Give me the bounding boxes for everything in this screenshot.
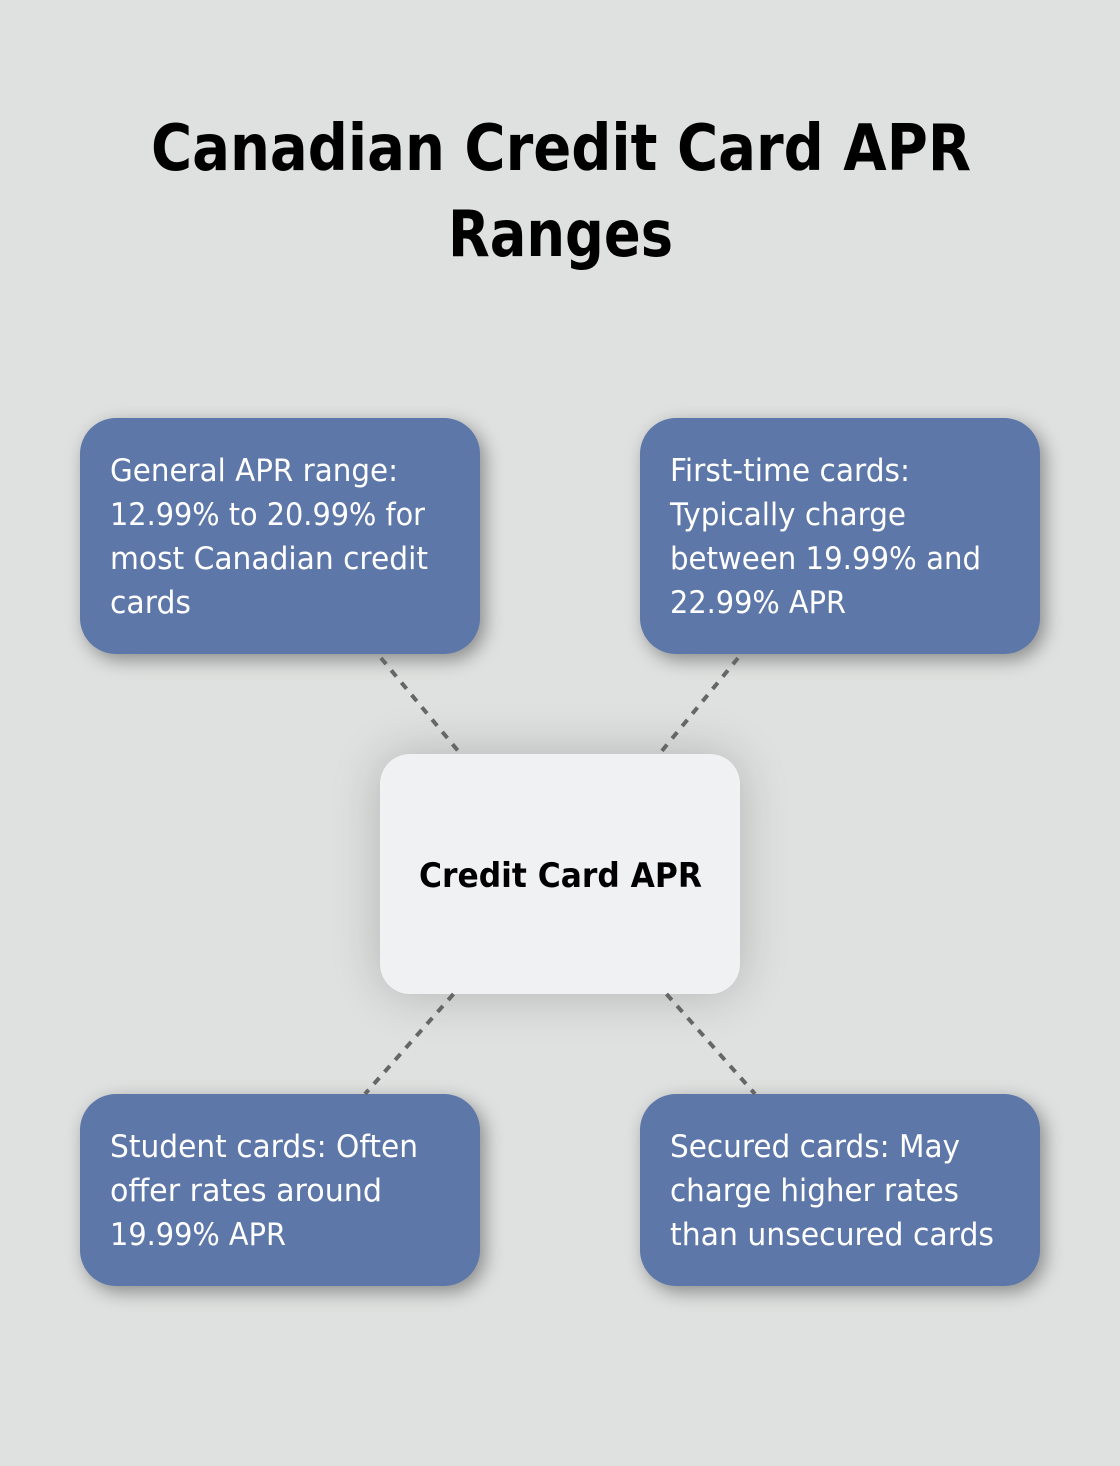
text: first-time cards: between 19.99% and bbox=[670, 541, 981, 577]
text: general APR range: General APR range: bbox=[110, 453, 398, 489]
connector: centre to secured card bbox=[666, 994, 755, 1094]
panel: central credit card APR node bbox=[380, 754, 740, 994]
text: general APR range: most Canadian credit bbox=[110, 541, 428, 577]
text: general APR range: 12.99% to 20.99% for bbox=[110, 497, 425, 533]
text: secured cards: than unsecured cards bbox=[670, 1217, 994, 1253]
panel: first-time cards card bbox=[640, 418, 1040, 654]
panel: secured cards card bbox=[640, 1094, 1040, 1286]
connector: general card to centre bbox=[381, 658, 459, 752]
title bbox=[151, 112, 971, 272]
text: general APR range bbox=[110, 453, 428, 621]
text: secured cards: Secured cards: May bbox=[670, 1129, 960, 1165]
connector: first-time card to centre bbox=[661, 658, 738, 752]
connector: centre to student card bbox=[365, 994, 454, 1094]
text: general APR range: cards bbox=[110, 585, 191, 621]
text: first-time cards: First-time cards: bbox=[670, 453, 910, 489]
text: student cards: offer rates around bbox=[110, 1173, 382, 1209]
text: student cards bbox=[110, 1129, 418, 1253]
text: first-time cards: 22.99% APR bbox=[670, 585, 846, 621]
title: Ranges bbox=[448, 198, 673, 272]
text: secured cards bbox=[670, 1129, 994, 1253]
text: first-time cards bbox=[669, 453, 981, 621]
panel: student cards card bbox=[80, 1094, 480, 1286]
text: student cards: Student cards: Often bbox=[110, 1129, 418, 1165]
text: first-time cards: Typically charge bbox=[669, 497, 906, 533]
title: Canadian Credit Card APR bbox=[151, 112, 971, 186]
text: student cards: 19.99% APR bbox=[110, 1217, 286, 1253]
panel: general APR card bbox=[80, 418, 480, 654]
text: central label: Credit Card APR bbox=[419, 856, 702, 896]
text: secured cards: charge higher rates bbox=[670, 1173, 959, 1209]
